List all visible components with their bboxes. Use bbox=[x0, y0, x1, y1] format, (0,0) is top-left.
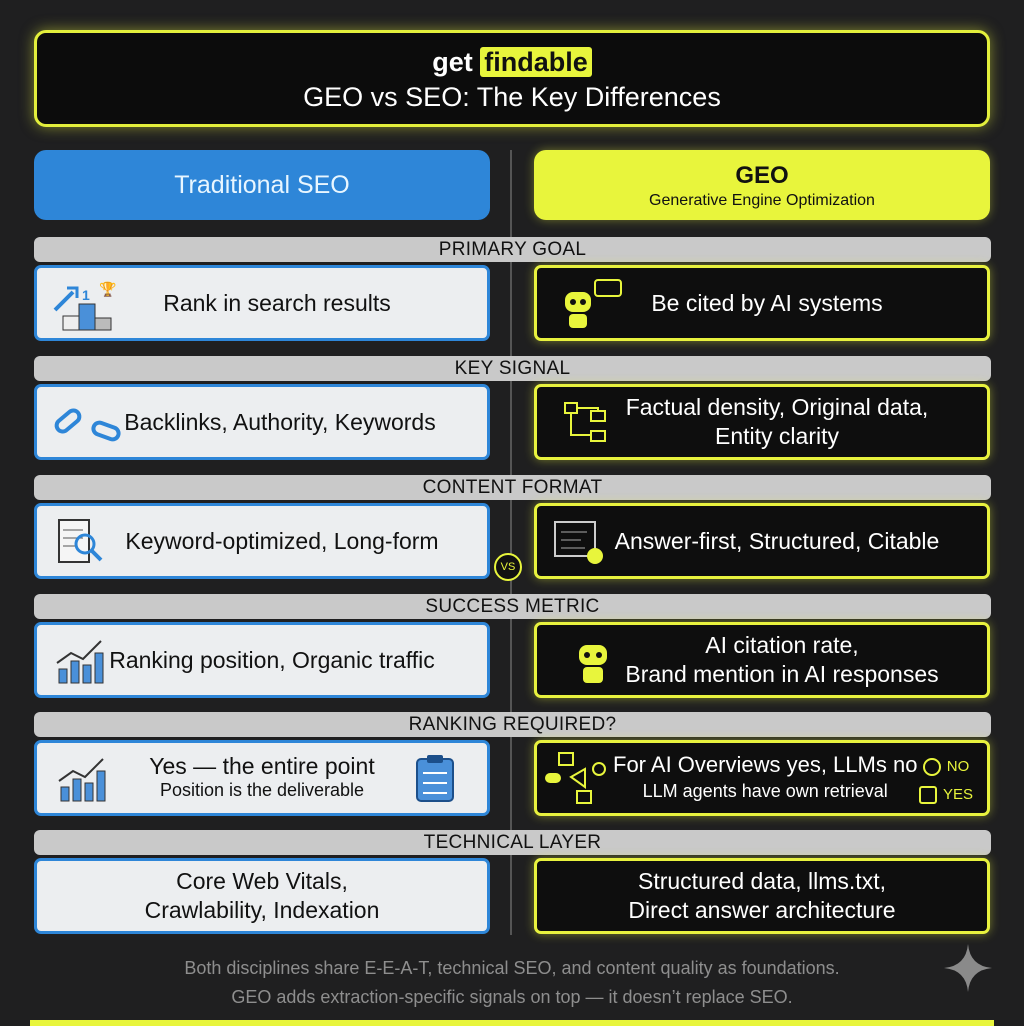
label: ranking required: RANKING REQUIRED? bbox=[409, 714, 616, 735]
label: primary goal bbox=[34, 237, 991, 262]
label: key signal: KEY SIGNAL bbox=[455, 358, 570, 379]
label: technical layer: TECHNICAL LAYER bbox=[424, 832, 601, 853]
vs badge bbox=[494, 553, 522, 581]
card: SEO content format bbox=[34, 503, 490, 579]
legend: no/yes bbox=[919, 758, 973, 804]
label: key signal bbox=[34, 356, 991, 381]
card: GEO technical layer: Direct answer architecture bbox=[628, 897, 896, 923]
card: SEO primary goal bbox=[34, 265, 490, 341]
card: GEO success metric: Brand mention in AI responses bbox=[625, 661, 939, 687]
icon: podium: 🏆 bbox=[99, 281, 117, 298]
bottom yellow bar bbox=[30, 1020, 994, 1026]
icon: code window bbox=[554, 521, 603, 564]
card: GEO ranking required: LLM agents have own retrieval bbox=[643, 781, 888, 801]
card: SEO ranking required: Position is the deliverable bbox=[160, 780, 364, 800]
card: SEO content format: Keyword-optimized, Long-form bbox=[125, 528, 439, 554]
card: GEO technical layer: Structured data, llms.txt, bbox=[638, 868, 886, 894]
footer note bbox=[184, 958, 840, 1007]
icon: robot bbox=[579, 645, 607, 683]
card: GEO technical layer bbox=[534, 858, 990, 934]
title heading: GEO vs SEO: The Key Differences bbox=[303, 82, 721, 112]
icon: bar chart bbox=[58, 758, 106, 802]
icon: podium bbox=[54, 281, 117, 330]
header: GEO: Generative Engine Optimization bbox=[649, 192, 875, 209]
icon: scroll magnifier bbox=[58, 519, 102, 563]
card: SEO success metric bbox=[34, 622, 490, 698]
card: GEO key signal: Entity clarity bbox=[715, 423, 839, 449]
icon: clipboard bbox=[416, 755, 454, 802]
icon: robot bbox=[565, 279, 622, 328]
header: Traditional SEO: Traditional SEO bbox=[174, 171, 350, 199]
label: success metric bbox=[34, 594, 991, 619]
footer note: GEO adds extraction-specific signals on top — it doesn’t replace SEO. bbox=[231, 987, 793, 1007]
card: GEO primary goal bbox=[534, 265, 990, 341]
header: GEO bbox=[534, 150, 990, 220]
card: GEO ranking required bbox=[534, 740, 990, 816]
label: technical layer bbox=[34, 830, 991, 855]
icon: bar chart bbox=[56, 640, 104, 684]
divider line bbox=[510, 150, 512, 935]
card: GEO content format: Answer-first, Structured, Citable bbox=[615, 528, 939, 554]
label: primary goal: PRIMARY GOAL bbox=[439, 239, 586, 260]
card: SEO primary goal: Rank in search results bbox=[163, 290, 391, 316]
card: GEO success metric bbox=[534, 622, 990, 698]
card: GEO content format bbox=[534, 503, 990, 579]
icon: sparkle bbox=[944, 944, 992, 992]
legend: no/yes: YES bbox=[943, 786, 973, 803]
card: SEO key signal bbox=[34, 384, 490, 460]
icon: podium: 1 bbox=[82, 287, 90, 303]
icon: chain links bbox=[54, 408, 121, 442]
legend: no/yes: NO bbox=[947, 758, 969, 775]
card: GEO ranking required: For AI Overviews yes, LLMs no bbox=[613, 752, 917, 777]
card: SEO technical layer bbox=[34, 858, 490, 934]
brand: get findable bbox=[432, 47, 588, 77]
icon: chat megaphone bbox=[545, 752, 606, 804]
card: SEO technical layer: Crawlability, Indexation bbox=[145, 897, 379, 923]
card: SEO key signal: Backlinks, Authority, Keywords bbox=[124, 408, 436, 434]
card: SEO success metric: Ranking position, Organic traffic bbox=[109, 646, 435, 672]
header: GEO: GEO bbox=[735, 162, 789, 189]
vs badge: VS bbox=[501, 561, 515, 573]
card: GEO success metric: AI citation rate, bbox=[705, 632, 859, 658]
card: GEO key signal bbox=[534, 384, 990, 460]
card: GEO primary goal: Be cited by AI systems bbox=[651, 290, 883, 316]
card: SEO technical layer: Core Web Vitals, bbox=[176, 868, 348, 894]
card: SEO ranking required: Yes — the entire point bbox=[149, 753, 375, 779]
label: content format bbox=[34, 475, 991, 500]
title box bbox=[34, 30, 990, 127]
label: content format: CONTENT FORMAT bbox=[423, 477, 602, 498]
card: GEO key signal: Factual density, Original data, bbox=[626, 394, 928, 420]
header: Traditional SEO bbox=[34, 150, 490, 220]
footer note: Both disciplines share E-E-A-T, technical SEO, and content quality as foundations. bbox=[184, 958, 840, 978]
icon: flowchart bbox=[564, 402, 606, 442]
label: ranking required bbox=[34, 712, 991, 737]
label: success metric: SUCCESS METRIC bbox=[425, 596, 600, 617]
card: SEO ranking required bbox=[34, 740, 490, 816]
